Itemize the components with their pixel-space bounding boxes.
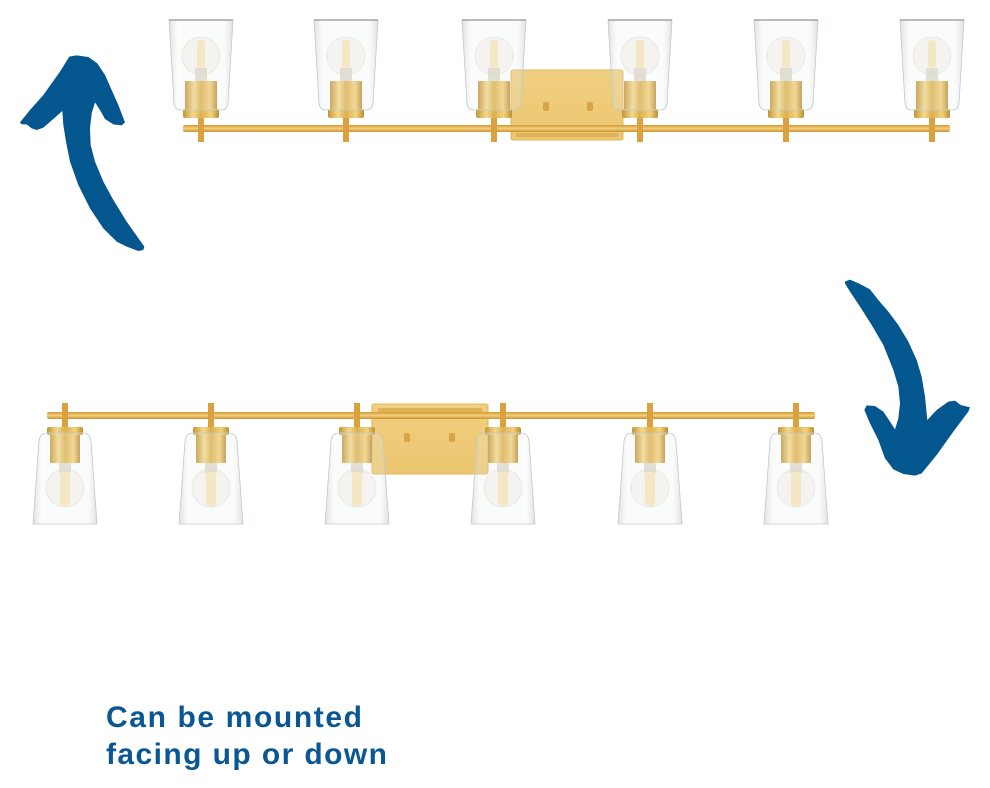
lamp 4 down xyxy=(471,403,535,524)
caption line 1: Can be mounted xyxy=(106,701,362,734)
lamp 4 up xyxy=(608,20,672,142)
lamp 2 down xyxy=(179,403,243,524)
caption line 2: facing up or down xyxy=(106,738,387,771)
backplate: upward fixture xyxy=(511,70,623,140)
icon: curved arrow pointing up xyxy=(20,55,144,251)
lamp 6 down xyxy=(764,403,828,524)
upward-facing light fixture xyxy=(169,20,964,142)
downward-facing light fixture xyxy=(33,403,828,524)
icon: curved arrow pointing down xyxy=(845,280,970,476)
bar: upward fixture xyxy=(183,125,950,132)
lamp 1 up xyxy=(169,20,233,142)
caption xyxy=(106,701,387,771)
lamp 3 up xyxy=(462,20,526,142)
lamp 1 down xyxy=(33,403,97,524)
lamp 3 down xyxy=(325,403,389,524)
lamp 6 up xyxy=(900,20,964,142)
lamp 5 down xyxy=(618,403,682,524)
backplate: downward fixture xyxy=(372,404,488,474)
bar: downward fixture xyxy=(47,412,815,419)
lamp 5 up xyxy=(754,20,818,142)
lamp 2 up xyxy=(314,20,378,142)
